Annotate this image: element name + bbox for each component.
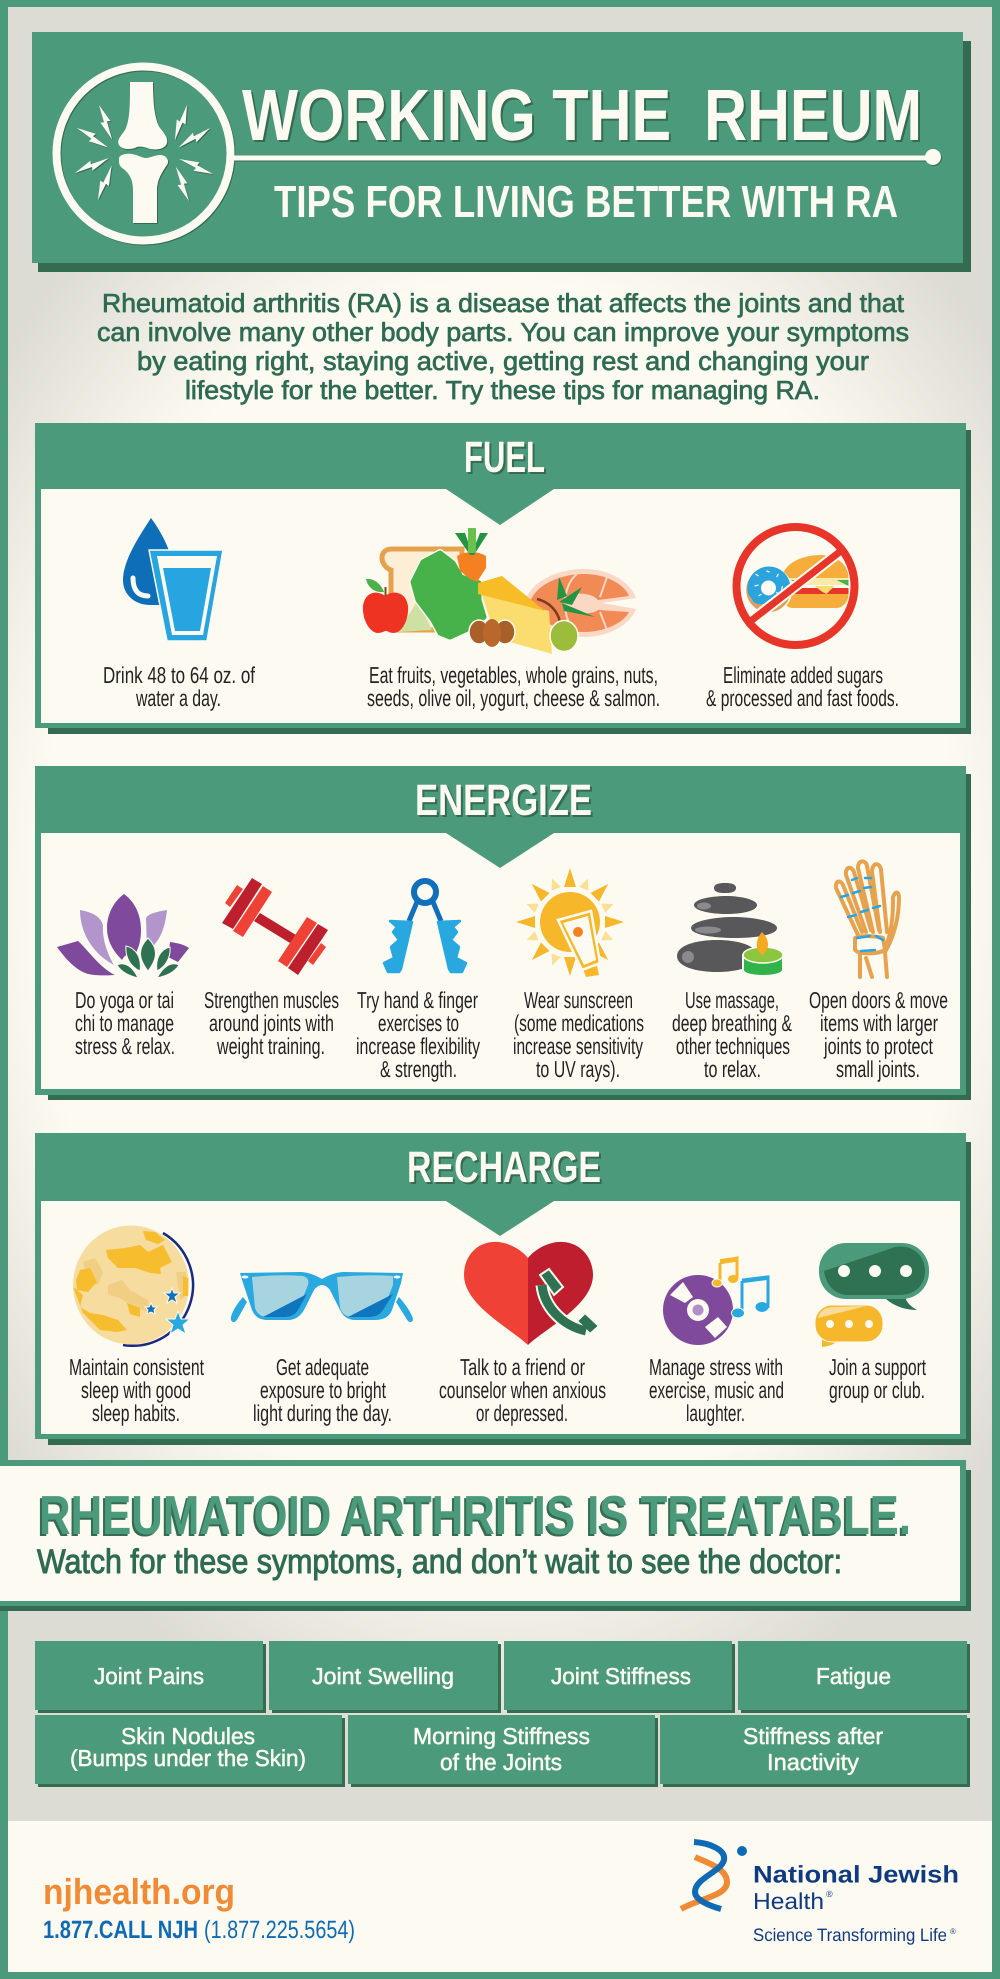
caption: hand exercises: increase flexibility [356, 1033, 480, 1059]
icon: healthy foods [363, 528, 636, 654]
icon: sunglasses [231, 1272, 413, 1322]
symptom: stiffness after inactivity: Stiffness after [743, 1723, 883, 1749]
icon: sun and sunscreen [516, 868, 624, 977]
symptoms grid [35, 1641, 970, 1787]
symptom: morning stiffness: of the Joints [440, 1749, 562, 1775]
caption: massage: Use massage, [685, 987, 779, 1013]
caption: yoga: Do yoga or tai [75, 987, 174, 1013]
caption: eliminate: & processed and fast foods. [706, 685, 899, 711]
intro text [97, 288, 909, 405]
heading: energize: ENERGIZE [415, 776, 592, 825]
intro text: lifestyle for the better. Try these tips for managing RA. [185, 375, 820, 405]
panel: fuel [35, 423, 971, 734]
caption: massage: other techniques [676, 1033, 790, 1059]
icon: dumbbell [222, 878, 328, 975]
symptom: stiffness after inactivity: Inactivity [767, 1749, 860, 1775]
logo: national jewish health: National Jewish [753, 1862, 959, 1888]
caption: eliminate: Eliminate added sugars [723, 662, 883, 688]
caption: yoga [75, 987, 175, 1059]
caption: protect joints: joints to protect [823, 1033, 933, 1059]
symptom: joint swelling [269, 1641, 501, 1713]
caption: protect joints [809, 987, 948, 1082]
caption: support group [829, 1354, 926, 1403]
caption: protect joints: items with larger [820, 1010, 938, 1036]
caption: talk to a friend: or depressed. [476, 1400, 568, 1426]
caption: talk to a friend: Talk to a friend or [460, 1354, 585, 1380]
phone number: 1.877.CALL NJH [43, 1916, 198, 1944]
caption: manage stress: exercise, music and [649, 1377, 784, 1403]
caption: hand exercises: exercises to [378, 1010, 459, 1036]
subheading: Watch for these symptoms, and don’t wait to see the doctor: [37, 1543, 842, 1581]
symptom: skin nodules: (Bumps under the Skin) [70, 1745, 306, 1771]
caption: hand exercises [356, 987, 480, 1082]
caption: eliminate [706, 662, 899, 711]
symptom: joint swelling: Joint Swelling [312, 1663, 454, 1689]
caption: protect joints: small joints. [836, 1056, 920, 1082]
caption: talk to a friend [439, 1354, 606, 1426]
caption: bright light [253, 1354, 392, 1426]
icon: stones and candle [677, 883, 783, 976]
symptom: fatigue [738, 1641, 970, 1713]
caption: bright light: Get adequate [276, 1354, 369, 1380]
caption: manage stress: Manage stress with [649, 1354, 783, 1380]
caption: yoga: stress & relax. [75, 1033, 175, 1059]
header banner [32, 32, 971, 272]
caption: sunscreen: Wear sunscreen [524, 987, 633, 1013]
caption: weights [204, 987, 339, 1059]
icon: lotus [57, 894, 189, 978]
caption: weights: around joints with [209, 1010, 334, 1036]
caption: sunscreen: (some medications [514, 1010, 644, 1036]
caption: weights: weight training. [216, 1033, 325, 1059]
icon: moon and stars [73, 1226, 193, 1346]
symptom: morning stiffness: Morning Stiffness [413, 1723, 590, 1749]
caption: sunscreen: increase sensitivity [513, 1033, 643, 1059]
caption: foods: Eat fruits, vegetables, whole grains, nuts, [369, 662, 658, 688]
panel: treatable banner [0, 1460, 971, 1611]
caption: manage stress: laughter. [686, 1400, 745, 1426]
caption: sleep: sleep with good [81, 1377, 191, 1403]
caption: foods [367, 662, 660, 711]
icon: speech bubbles [815, 1243, 929, 1347]
panel: energize [35, 766, 971, 1100]
caption: bright light: exposure to bright [260, 1377, 386, 1403]
symptom: fatigue: Fatigue [816, 1663, 891, 1689]
caption: manage stress [649, 1354, 784, 1426]
caption: support group: Join a support [829, 1354, 926, 1380]
caption: talk to a friend: counselor when anxious [439, 1377, 606, 1403]
icon: hand joints [836, 861, 899, 977]
caption: yoga: chi to manage [75, 1010, 174, 1036]
caption: hand exercises: & strength. [380, 1056, 457, 1082]
icon: knee joint in circle [56, 66, 941, 240]
icon: hand grip [384, 881, 466, 972]
symptom: joint stiffness: Joint Stiffness [551, 1663, 691, 1689]
icon: no sugar or fast food [736, 527, 854, 645]
symptom: skin nodules [35, 1715, 345, 1787]
logo: national jewish health: ® [826, 1889, 833, 1899]
caption: foods: seeds, olive oil, yogurt, cheese & salmon. [367, 685, 660, 711]
caption: water: water a day. [135, 685, 221, 711]
caption: sunscreen [513, 987, 644, 1082]
website: njhealth.org [43, 1871, 235, 1912]
caption: water [103, 662, 255, 711]
logo: national jewish health [681, 1842, 959, 1945]
panel: recharge [35, 1133, 971, 1445]
icon: water drop and glass [123, 518, 223, 641]
caption: support group: group or club. [829, 1377, 925, 1403]
caption: massage: deep breathing & [672, 1010, 792, 1036]
symptom: joint pains: Joint Pains [94, 1663, 204, 1689]
caption: sunscreen: to UV rays). [536, 1056, 620, 1082]
caption: bright light: light during the day. [253, 1400, 392, 1426]
heading: recharge: RECHARGE [407, 1143, 601, 1192]
caption: weights: Strengthen muscles [204, 987, 339, 1013]
intro text: can involve many other body parts. You can improve your symptoms [97, 317, 909, 347]
caption: massage: to relax. [704, 1056, 761, 1082]
caption: sleep: Maintain consistent [69, 1354, 204, 1380]
logo: national jewish health: ® [950, 1927, 956, 1936]
logo: national jewish health: Health [753, 1888, 824, 1914]
symptom: morning stiffness [348, 1715, 658, 1787]
logo: national jewish health: Science Transforming Life [753, 1925, 947, 1945]
phone number [43, 1916, 355, 1944]
caption: sleep: sleep habits. [92, 1400, 180, 1426]
intro text: Rheumatoid arthritis (RA) is a disease that affects the joints and that [102, 288, 905, 318]
caption: water: Drink 48 to 64 oz. of [103, 662, 255, 688]
icon: disc and music notes [663, 1257, 768, 1345]
symptom: skin nodules: Skin Nodules [121, 1723, 255, 1749]
heading: fuel: FUEL [464, 433, 545, 482]
icon: heart and phone [464, 1242, 599, 1345]
caption: sleep [69, 1354, 204, 1426]
footer [8, 1821, 992, 1972]
symptom: stiffness after inactivity [660, 1715, 970, 1787]
caption: hand exercises: Try hand & finger [357, 987, 478, 1013]
phone number: (1.877.225.5654) [204, 1916, 355, 1944]
symptom: joint pains [35, 1641, 266, 1713]
caption: massage [672, 987, 792, 1082]
intro text: by eating right, staying active, getting rest and changing your [137, 346, 869, 376]
symptom: joint stiffness [504, 1641, 735, 1713]
